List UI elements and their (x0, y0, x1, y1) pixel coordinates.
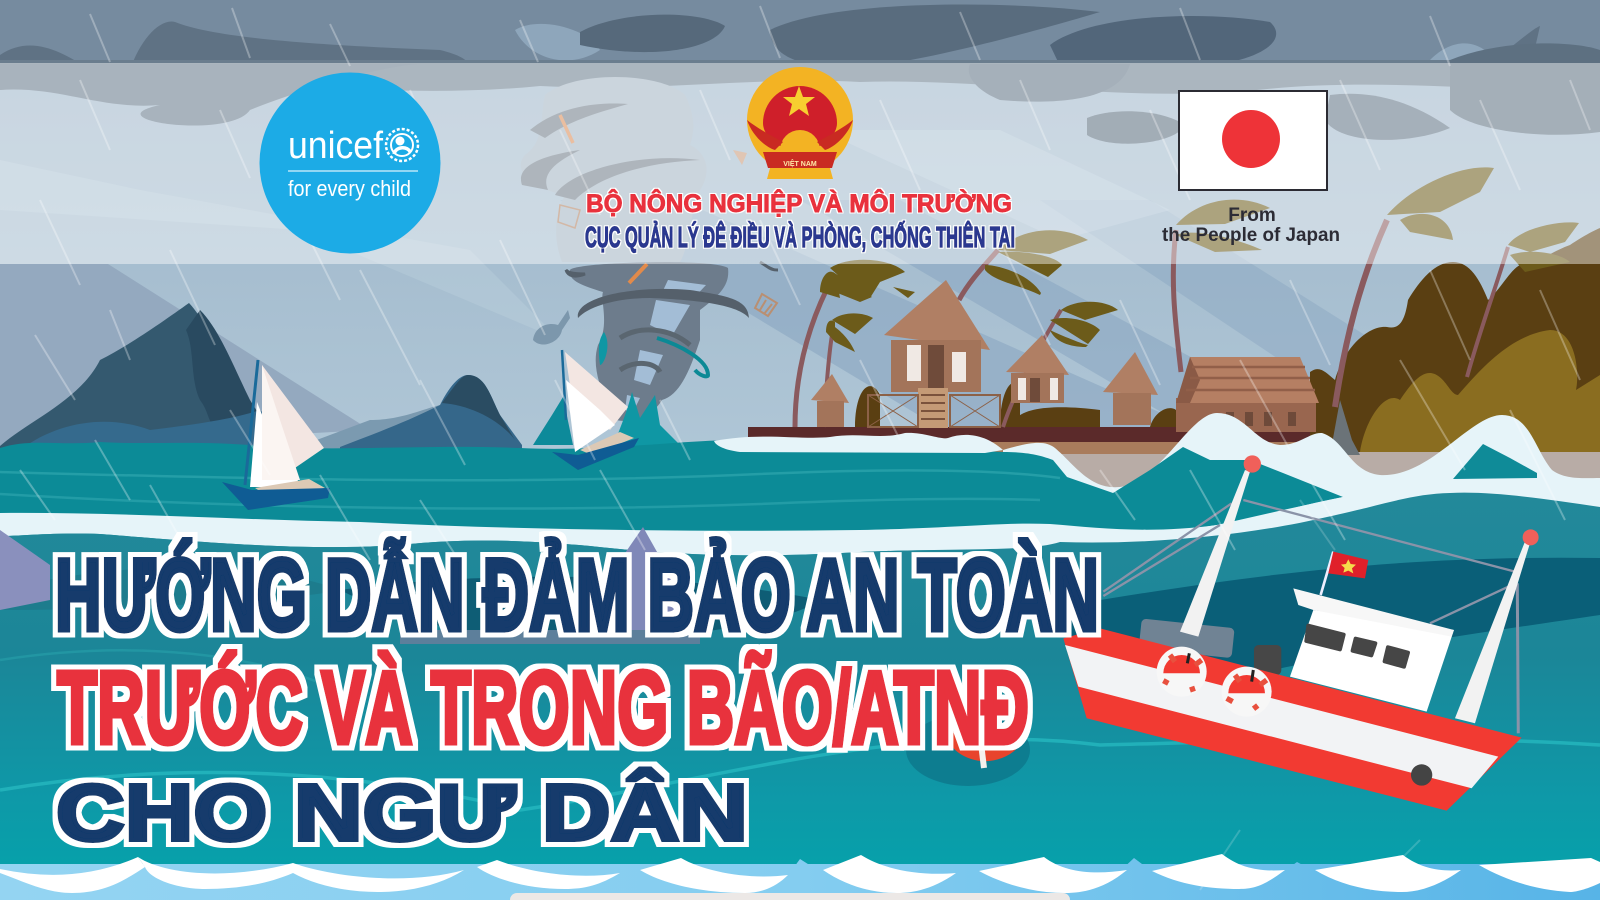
ministry heading: BỘ NÔNG NGHIỆP VÀ MÔI TRƯỜNG (586, 188, 1012, 218)
masts (1180, 455, 1539, 723)
sea far (0, 440, 1343, 560)
floating lifebuoy (906, 714, 1030, 786)
logo: UNICEF: for every child (288, 176, 411, 201)
bushes right (855, 228, 1600, 455)
deck gear (1139, 619, 1281, 675)
teal wave on right foam (1453, 444, 1537, 479)
ministry heading: CỤC QUẢN LÝ ĐÊ ĐIỀU VÀ PHÒNG, CHỐNG THIÊN TAI (585, 220, 1015, 254)
white foam behind sea (1003, 413, 1600, 560)
palm leaves (820, 167, 1579, 352)
ministry heading (585, 188, 1015, 254)
logo: UNICEF: unicef (288, 125, 383, 167)
cabin (1290, 588, 1454, 712)
header translucent band (0, 63, 1600, 264)
tornado (521, 77, 778, 452)
logo: Vietnam national emblem (747, 67, 853, 179)
white crescents (0, 854, 1600, 893)
flag (1321, 552, 1368, 595)
Japan caption: the People of Japan (1162, 225, 1340, 246)
logo: Vietnam national emblem: VIỆT NAM (783, 159, 817, 168)
bottom white card edge (510, 893, 1070, 900)
Japan caption: From (1228, 205, 1276, 226)
island: sand and land (740, 427, 1600, 502)
large hut (1176, 357, 1319, 432)
mountains (0, 303, 522, 452)
bottom waves (0, 854, 1600, 900)
white foam waves (0, 433, 1600, 555)
logo: Japan flag (1179, 91, 1327, 190)
sky background (0, 0, 1600, 470)
logo: UNICEF (260, 72, 440, 254)
lifebuoys (1157, 647, 1272, 717)
sailboat right (533, 350, 639, 470)
stilt houses (811, 280, 1158, 428)
sailboat left (222, 360, 330, 510)
storm clouds (0, 0, 1600, 144)
hull (1063, 628, 1522, 811)
icon: UNICEF emblem (386, 129, 418, 161)
Japan caption (1162, 205, 1340, 246)
rigging (1103, 500, 1518, 733)
main title: TRƯỚC VÀ TRONG BÃO/ATNĐ (57, 650, 1029, 765)
main title (55, 538, 1099, 857)
debris: fish (533, 310, 570, 345)
main title: CHO NGƯ DÂN (56, 768, 748, 857)
sunken sail behind title (0, 527, 700, 644)
fishing boat (1063, 455, 1539, 811)
mid sea (0, 493, 1600, 900)
palm trees (795, 220, 1508, 427)
